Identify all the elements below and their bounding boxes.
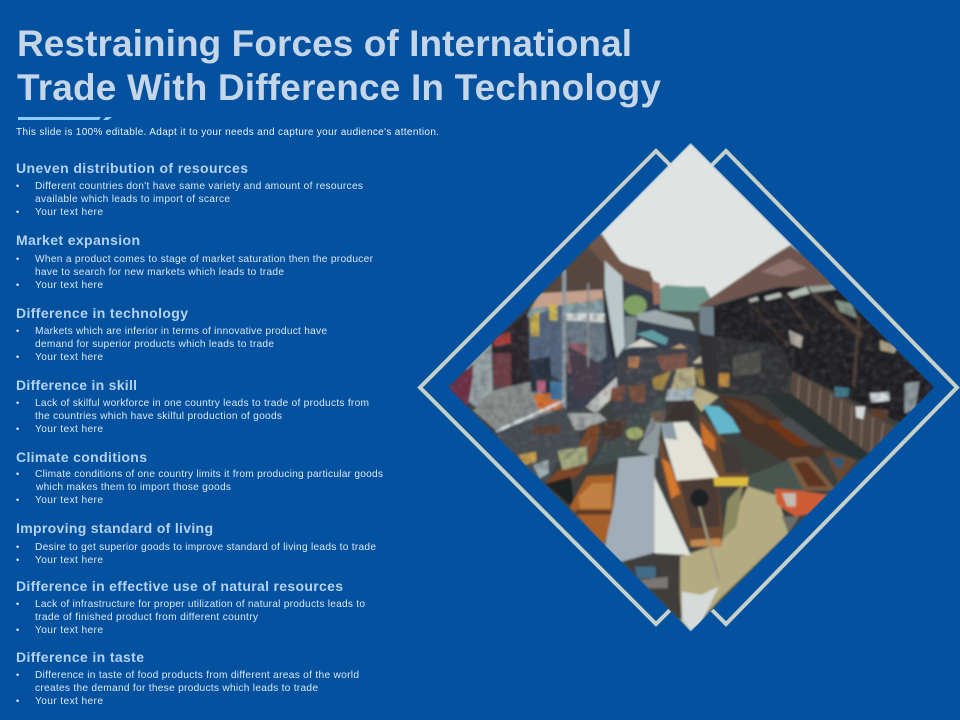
panel: climate conditions xyxy=(16,449,383,506)
sky xyxy=(540,142,933,618)
white tall wall xyxy=(605,261,625,358)
bullet list: effective use of natural resources: Your text here xyxy=(35,625,103,636)
bullet list: difference in technology xyxy=(16,326,327,363)
bullet list: market expansion: • xyxy=(16,280,19,290)
title xyxy=(17,23,661,108)
title: Restraining Forces of International xyxy=(17,23,632,64)
orange crate and barrel xyxy=(533,392,563,413)
bullet list: improving standard of living: • xyxy=(16,542,19,552)
bullet list: uneven distribution: Your text here xyxy=(35,207,103,218)
bullet list: difference in skill xyxy=(16,398,369,435)
bullet list: effective use of natural resources xyxy=(16,599,365,636)
right building wall xyxy=(699,307,714,347)
heading: difference in taste: Difference in taste xyxy=(16,649,144,665)
right diamond frame xyxy=(712,151,957,624)
people xyxy=(529,357,552,393)
boat with greens xyxy=(546,423,600,484)
bullet list: effective use of natural resources: Lack of infrastructure for proper utilization of natural products leads to xyxy=(35,599,365,610)
right long boats xyxy=(719,395,825,461)
bullet list: market expansion: When a product comes to stage of market saturation then the producer xyxy=(35,254,374,265)
panel: improving standard of living xyxy=(16,520,376,566)
dark water right xyxy=(747,460,805,495)
heading: difference in technology: Difference in technology xyxy=(16,305,188,321)
left grey wall and red cloth xyxy=(466,343,493,407)
food packets xyxy=(775,489,828,517)
bullet list: effective use of natural resources: • xyxy=(16,599,19,609)
right tip details xyxy=(905,382,919,413)
dark moored boats xyxy=(599,417,628,442)
white railing xyxy=(496,401,564,432)
bullet list: climate conditions xyxy=(16,469,383,506)
bullet list: difference in taste: Difference in taste of food products from different areas of the world xyxy=(35,670,359,681)
bullet list: uneven distribution xyxy=(16,181,363,218)
panel: difference in taste xyxy=(16,649,359,707)
bullet list: difference in skill: Lack of skilful workforce in one country leads to trade of products from xyxy=(35,398,369,409)
railing xyxy=(791,371,894,455)
panel: difference in skill xyxy=(16,377,369,435)
title: Trade With Difference In Technology xyxy=(17,67,661,108)
central boat hull xyxy=(658,435,723,546)
roof underside lights xyxy=(787,287,810,298)
market umbrellas xyxy=(627,339,658,347)
right roof xyxy=(698,245,835,307)
left diamond frame xyxy=(420,151,670,624)
grey canopy xyxy=(605,455,655,562)
pole xyxy=(562,270,566,437)
small tan boat xyxy=(787,457,837,491)
photo texture: dark market detail xyxy=(445,230,936,470)
bullet list: difference in technology: Markets which are inferior in terms of innovative product have xyxy=(35,326,327,337)
heading: climate conditions: Climate conditions xyxy=(16,449,147,465)
panel: difference in technology xyxy=(16,305,327,363)
bullet list: difference in taste: creates the demand for these products which leads to trade xyxy=(35,683,318,694)
heading: market expansion: Market expansion xyxy=(16,232,140,248)
bullet list: climate conditions: • xyxy=(16,469,19,479)
distant canal boats and crowd xyxy=(610,343,701,417)
left roof xyxy=(587,234,654,293)
bullet list: improving standard of living: Your text here xyxy=(35,555,103,566)
subtitle: This slide is 100% editable. Adapt it to your needs and capture your audience's attention. xyxy=(16,127,439,138)
bullet list: uneven distribution: Different countries don't have same variety and amount of resources xyxy=(35,181,363,192)
heading: effective use of natural resources: Difference in effective use of natural resources xyxy=(16,578,343,594)
heading: uneven distribution: Uneven distribution of resources xyxy=(16,160,248,176)
dark gap xyxy=(546,476,574,506)
pavement xyxy=(473,382,557,432)
boats under railing xyxy=(778,417,827,447)
bullet list: difference in taste: Your text here xyxy=(35,696,103,707)
panel: difference in effective use of natural resources xyxy=(16,578,365,636)
dining area xyxy=(496,407,585,483)
orange boat lower left xyxy=(570,475,614,545)
bullet list: climate conditions: which makes them to import those goods xyxy=(35,482,231,493)
mid canal dark water xyxy=(592,397,666,467)
photo: floating market in diamond xyxy=(445,143,936,632)
bullet list: difference in skill: • xyxy=(16,398,19,408)
bullet list: uneven distribution: • xyxy=(16,207,19,217)
green tree xyxy=(624,295,647,315)
bullet list: effective use of natural resources: • xyxy=(16,625,19,635)
blue-canopy boat xyxy=(699,413,749,477)
bullet list: difference in taste: • xyxy=(16,670,19,680)
bullet list: effective use of natural resources: trade of finished product from different country xyxy=(35,612,259,623)
bullet list: market expansion: have to search for new markets which leads to trade xyxy=(35,267,284,278)
below canopy boat xyxy=(678,597,683,620)
bullet list: difference in technology: • xyxy=(16,352,19,362)
heading: improving standard of living: Improving standard of living xyxy=(16,520,213,536)
hanging clothes xyxy=(529,303,566,383)
bullet list: climate conditions: Your text here xyxy=(35,495,103,506)
distant trees xyxy=(652,285,712,312)
bullet list: difference in technology: • xyxy=(16,326,19,336)
right building dark interior xyxy=(714,287,934,423)
mid market under roof xyxy=(698,333,792,397)
bullet list: uneven distribution: available which leads to import of scarce xyxy=(35,194,230,205)
scene base below the skyline xyxy=(538,233,900,628)
khaki water main xyxy=(680,485,788,632)
panel: market expansion xyxy=(16,232,374,291)
bullet list: uneven distribution: • xyxy=(16,181,19,191)
title underline accent xyxy=(18,117,112,120)
bullet list: difference in skill: the countries which have skilful production of goods xyxy=(35,411,282,422)
bullet list: improving standard of living: • xyxy=(16,555,19,565)
bullet list: market expansion xyxy=(16,254,374,291)
photo texture: light market detail xyxy=(445,230,936,470)
walkway ledge xyxy=(584,376,619,414)
bullet list: market expansion: • xyxy=(16,254,19,264)
bullet list: improving standard of living: Desire to get superior goods to improve standard of living leads to trade xyxy=(35,542,376,553)
bullet list: climate conditions: • xyxy=(16,495,19,505)
roof beams xyxy=(813,293,863,337)
bullet list: climate conditions: Climate conditions of one country limits it from producing particular goods xyxy=(35,469,383,480)
bullet list: difference in skill: • xyxy=(16,424,19,434)
bullet list: improving standard of living xyxy=(16,542,376,566)
left market backdrop xyxy=(462,261,698,450)
yellow crate xyxy=(713,477,749,486)
bullet list: market expansion: Your text here xyxy=(35,280,103,291)
foam xyxy=(682,587,719,632)
bullet list: difference in taste xyxy=(16,670,359,707)
panel: uneven distribution of resources xyxy=(16,160,363,218)
bullet list: difference in skill: Your text here xyxy=(35,424,103,435)
water upper xyxy=(668,367,719,412)
bullet list: difference in technology: demand for superior products which leads to trade xyxy=(35,339,274,350)
central boat white canopy xyxy=(661,422,728,481)
bullet list: difference in technology: Your text here xyxy=(35,352,103,363)
bullet list: difference in taste: • xyxy=(16,696,19,706)
wall under railing xyxy=(764,393,870,461)
heading: difference in skill: Difference in skill xyxy=(16,377,137,393)
